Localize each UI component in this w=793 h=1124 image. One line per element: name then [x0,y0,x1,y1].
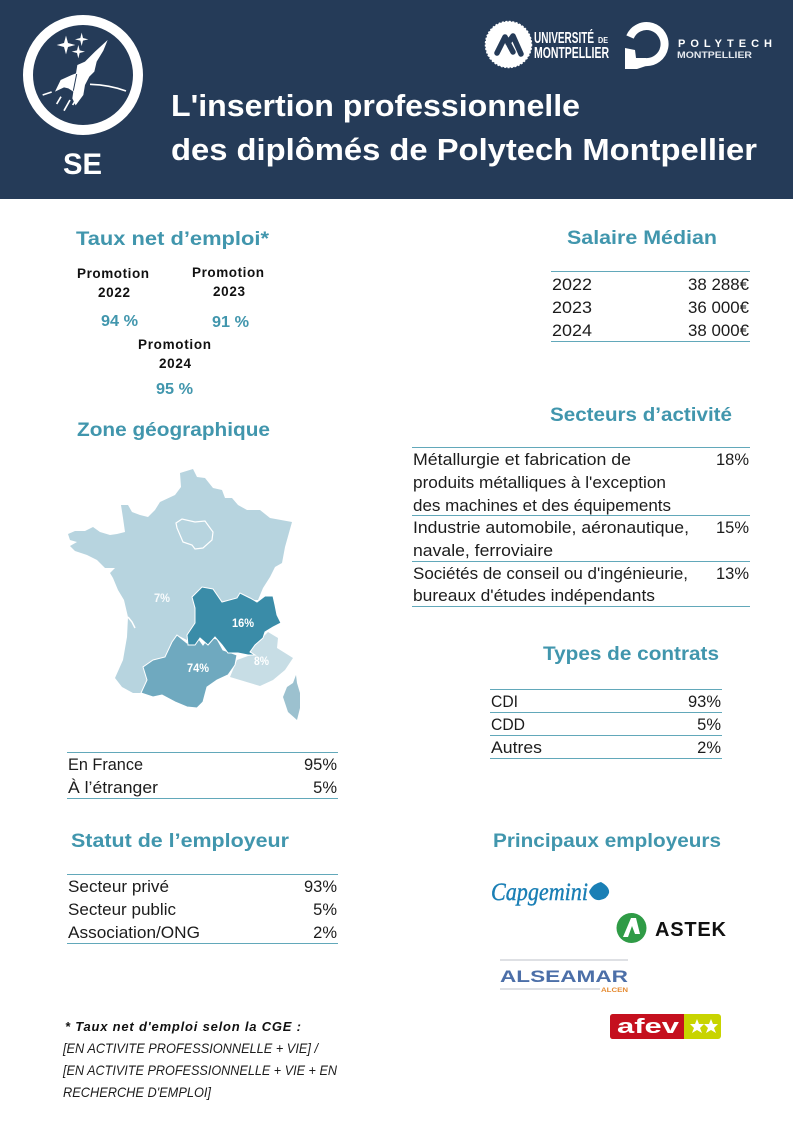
heading: statut de l'employeur: Statut de l’employeur [71,830,289,852]
logo: Université de Montpellier: DE [598,36,609,45]
promotion 2024: 95 % [156,381,193,398]
promotion 2022: 2022 [98,285,130,300]
table: statut [67,874,338,944]
table: contrats [490,690,722,758]
promotion 2024 [138,337,211,398]
table: contrats: CDD [491,716,525,734]
panel: salaire médian [551,227,750,342]
table: secteurs: Industrie automobile, aéronautique, [413,519,689,537]
logo: Alseamar: ALSEAMAR [500,967,628,986]
logo: Astek: ASTEK [655,919,727,941]
table: salaire: 2023 [552,299,592,317]
table: statut: Secteur public [68,901,176,919]
promotion 2024: 2024 [159,356,191,371]
table: statut: Association/ONG [68,924,200,942]
table: secteurs: 18% [716,451,749,469]
logo: Astek [616,913,727,943]
heading: salaire médian: Salaire Médian [567,227,717,249]
footnote: * Taux net d'emploi selon la CGE : [65,1019,301,1034]
panel: statut de l'employeur [67,830,338,944]
header banner [0,0,793,199]
table: salaire: 36 000€ [688,299,749,317]
promotion 2023 [192,265,264,331]
table: secteurs: Métallurgie et fabrication de [413,451,631,469]
footnote: RECHERCHE D'EMPLOI] [63,1084,212,1100]
table: secteurs: 15% [716,519,749,537]
promotion 2023: 2023 [213,284,245,299]
logo: Afev [610,1014,721,1039]
logo: Afev: afev [617,1016,680,1038]
table: contrats: 5% [697,716,721,734]
map of France: 74% [187,661,209,675]
table: statut: 93% [304,878,337,896]
table: salaire: 38 288€ [688,276,749,294]
table: statut: Secteur privé [68,878,169,896]
promotion 2022: 94 % [101,313,138,330]
table: secteurs: bureaux d'études indépendants [413,587,655,605]
promotion 2023: Promotion [192,265,264,280]
table: France / étranger: 95% [304,756,337,774]
table: salaire: 38 000€ [688,322,749,340]
promotion 2024: Promotion [138,337,211,352]
heading: zone géographique: Zone géographique [77,419,270,441]
table: salaire: 2024 [552,322,592,340]
footnote [62,1019,338,1100]
table: statut: 2% [313,924,337,942]
badge label: SE [63,148,102,181]
table: France / étranger: À l’étranger [68,778,159,797]
map of France [68,469,300,720]
heading: principaux employeurs: Principaux employeurs [493,830,721,852]
table: salaire [551,272,750,342]
map of France: 16% [232,616,254,630]
table: secteurs [412,448,750,606]
table: France / étranger: 5% [313,779,337,797]
panel: principaux employeurs [491,830,727,1039]
map of France: 7% [154,591,170,605]
table: secteurs: navale, ferroviaire [413,542,553,560]
title [171,88,757,167]
heading: taux net d'emploi: Taux net d’emploi* [76,228,269,250]
logo: Université de Montpellier: MONTPELLIER [534,45,609,62]
panel: types de contrats [490,643,722,758]
promotion 2023: 91 % [212,314,249,331]
table: France / étranger: En France [68,756,143,774]
logo: Capgemini: Capgemini [491,879,588,906]
table: contrats: 2% [697,739,721,757]
title: des diplômés de Polytech Montpellier [171,132,757,167]
logo: Université de Montpellier: UNIVERSITÉ [534,28,594,47]
logo: Alseamar [500,960,628,994]
logo: Polytech Montpellier: POLYTECH [678,38,772,50]
panel: zone géographique [67,419,338,798]
footnote: [EN ACTIVITE PROFESSIONNELLE + VIE] / [62,1040,320,1056]
footnote: [EN ACTIVITE PROFESSIONNELLE + VIE + EN [62,1062,338,1078]
title: L'insertion professionnelle [171,88,580,123]
promotion 2022: Promotion [77,266,149,281]
icon: rocket badge [28,20,138,130]
table: France / étranger [67,752,338,798]
heading: secteurs d'activité: Secteurs d’activité [550,404,732,426]
table: statut: 5% [313,901,337,919]
table: secteurs: produits métalliques à l'exception [413,474,666,492]
panel: taux net d'emploi [76,228,269,398]
table: secteurs: Sociétés de conseil ou d'ingénieurie, [413,565,688,583]
heading: types de contrats: Types de contrats [543,643,719,665]
table: contrats: CDI [491,693,518,711]
logo: Université de Montpellier [486,22,609,68]
logo: Polytech Montpellier [625,26,772,69]
panel: secteurs d'activité [412,404,750,606]
table: salaire: 2022 [552,276,592,294]
table: contrats: 93% [688,693,721,711]
table: secteurs: 13% [716,565,749,583]
table: contrats: Autres [491,739,542,757]
table: secteurs: des machines et des équipements [413,497,671,515]
promotion 2022 [77,266,149,330]
logo: Alseamar: ALCEN [601,987,628,994]
map of France: 8% [254,654,269,668]
logo: Polytech Montpellier: MONTPELLIER [677,50,752,61]
